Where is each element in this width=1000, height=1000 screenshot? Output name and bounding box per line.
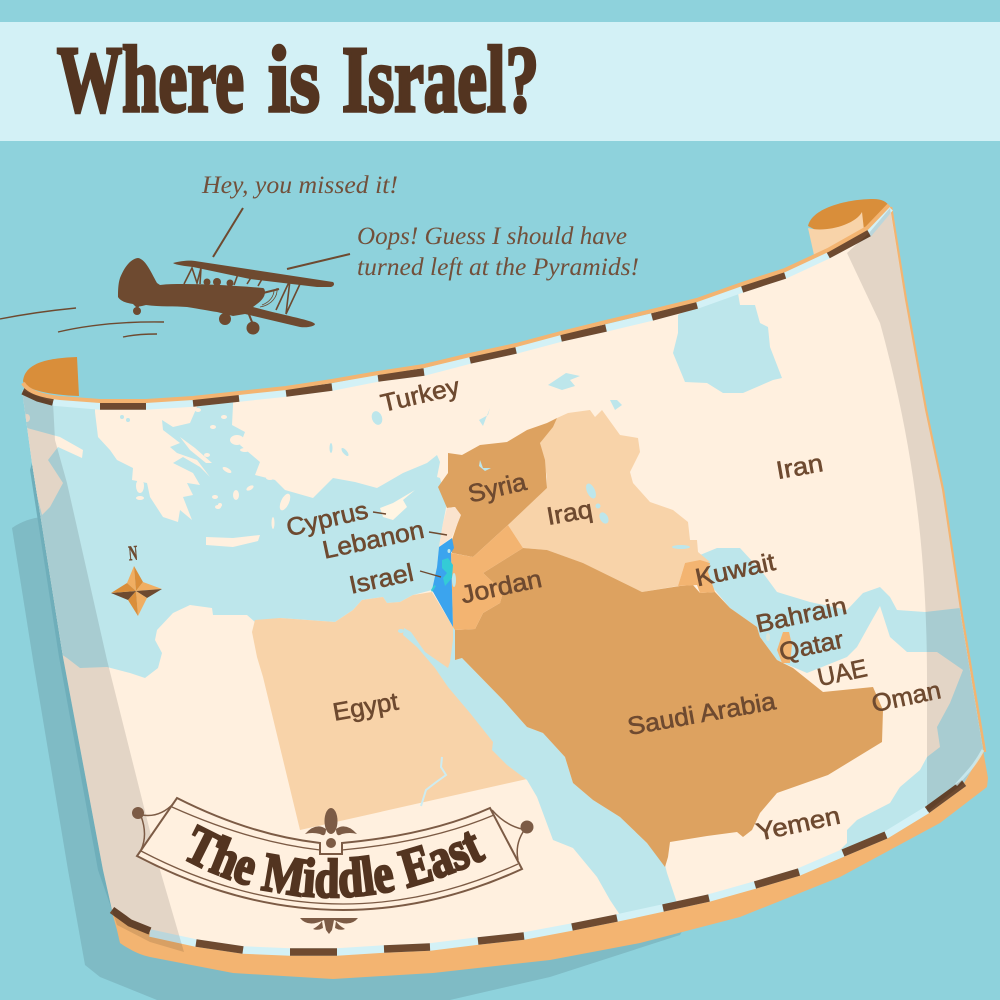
banner: The Middle East <box>132 796 534 934</box>
map labels: Saudi Arabia <box>625 687 778 741</box>
scroll underside <box>112 750 988 979</box>
Saudi Arabia <box>455 548 883 867</box>
compass: N <box>127 541 139 565</box>
title: Where <box>57 28 244 132</box>
Persian Gulf and Gulf of Oman <box>700 548 1000 860</box>
Syria <box>438 418 557 557</box>
Egypt <box>252 592 527 830</box>
panel: map sheet <box>22 207 983 948</box>
title band <box>0 22 1000 141</box>
compass <box>111 541 162 616</box>
scroll top edge band <box>23 208 890 406</box>
Kuwait <box>678 560 715 593</box>
right roll <box>808 199 889 255</box>
scroll shadow <box>12 517 700 1000</box>
map labels: Cyprus <box>284 496 371 542</box>
fold glare <box>956 750 983 785</box>
title <box>57 28 539 132</box>
map labels: Turkey <box>378 372 463 418</box>
biplane speech: passenger: turned left at the Pyramids! <box>357 254 639 281</box>
Israel <box>431 538 456 627</box>
scroll edge shadow strip <box>30 463 112 910</box>
biplane speech: passenger <box>287 223 639 281</box>
Lebanon <box>439 507 461 547</box>
map labels: Israel <box>347 559 416 600</box>
map labels: Oman <box>869 676 943 718</box>
title: Israel? <box>342 28 539 132</box>
biplane speech: passenger: Oops! Guess I should have <box>357 223 627 250</box>
map labels: Syria <box>465 468 529 508</box>
map labels: Iran <box>774 449 825 485</box>
Caspian Sea <box>673 290 782 393</box>
Mediterranean and Aegean sea <box>10 380 447 678</box>
Aegean islands and Italy <box>24 408 292 547</box>
Turkey lakes <box>120 373 622 457</box>
icon: biplane silhouette <box>118 258 334 334</box>
scroll right edge <box>891 207 985 752</box>
map labels: Bahrain <box>753 592 849 638</box>
fleur ornament <box>305 808 357 848</box>
label leader lines <box>373 512 447 577</box>
biplane speech: pilot <box>201 172 398 257</box>
map labels: Yemen <box>754 802 843 847</box>
biplane speech: pilot: Hey, you missed it! <box>201 172 398 199</box>
map labels: Kuwait <box>693 548 778 592</box>
scroll top orange edge <box>23 205 889 401</box>
banner inner rules <box>141 807 518 904</box>
title: is <box>268 28 320 132</box>
map labels <box>284 372 943 847</box>
Red Sea <box>403 626 677 920</box>
Nile <box>421 757 446 806</box>
Iraq <box>508 410 710 592</box>
map labels: Jordan <box>458 565 544 609</box>
lower ornament <box>300 918 358 934</box>
Qatar <box>777 632 792 663</box>
scroll bottom edge band <box>112 783 964 952</box>
map labels: Iraq <box>545 495 595 531</box>
Jordan <box>451 525 523 630</box>
banner corner ornaments <box>132 803 534 860</box>
left fold shading <box>22 390 184 952</box>
Iraq lakes <box>584 482 690 549</box>
map labels: UAE <box>815 654 870 692</box>
map labels: Qatar <box>777 626 846 667</box>
banner title: The Middle East <box>186 824 486 899</box>
map labels: Lebanon <box>320 516 427 565</box>
left roll <box>23 357 79 396</box>
Cyprus <box>380 490 415 520</box>
map labels: Egypt <box>331 688 401 727</box>
banner ribbon <box>137 798 522 910</box>
right fold shading <box>847 208 983 812</box>
motion lines <box>0 308 164 337</box>
